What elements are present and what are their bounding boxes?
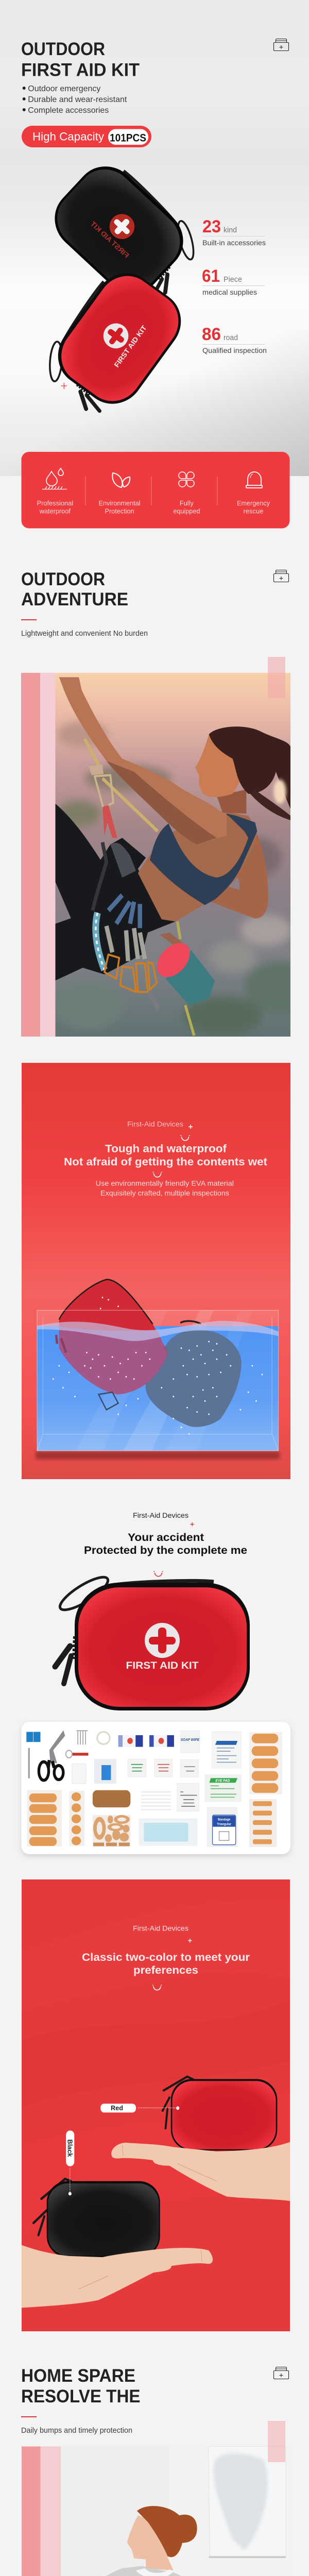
panel: kit contents: EYE PAD xyxy=(215,1779,230,1783)
item: plaster strip right xyxy=(249,1732,282,1794)
feature labels: waterproof xyxy=(39,507,71,515)
illustration: red and black kits on hands xyxy=(22,2077,290,2308)
heading: outdoor adventure: ADVENTURE xyxy=(21,589,128,609)
kit: black on hand xyxy=(33,2179,160,2257)
feature labels xyxy=(37,499,270,515)
stat: 23 kind xyxy=(202,217,266,247)
heading: home spare: HOME SPARE xyxy=(21,2366,135,2386)
item: sealed packets xyxy=(118,1735,174,1747)
feature labels: Fully xyxy=(180,499,194,507)
item: triangular bandage: Bandage xyxy=(218,1818,231,1822)
product: red first aid kit front view xyxy=(55,1572,250,1710)
text block: waterproof claim: Use environmentally friendly EVA material xyxy=(96,1179,234,1187)
photo panel: climber with pink stripes xyxy=(21,657,309,1038)
item: triangular bandage xyxy=(212,1815,236,1845)
kit: red on hand xyxy=(163,2077,277,2150)
title: outdoor first aid kit: OUTDOOR xyxy=(21,39,105,59)
text block: waterproof claim: First-Aid Devices xyxy=(127,1120,183,1128)
product: red kit, tilted: FIRST AID KIT xyxy=(113,324,148,369)
text block: two-color: First-Aid Devices xyxy=(133,1924,188,1932)
heading: home spare: RESOLVE THE xyxy=(21,2386,140,2406)
photo: climber on rope xyxy=(55,673,309,1038)
item: triangular bandage: Triangular xyxy=(217,1822,232,1826)
stat: 61 piece: medical supplies xyxy=(202,288,257,296)
heading: home spare: Daily bumps and timely protection xyxy=(21,2427,132,2435)
stat: 61 piece xyxy=(202,266,265,296)
item: plaster strip lower right xyxy=(249,1799,277,1847)
photo panel: woman at home with pink stripes xyxy=(22,2421,291,2576)
badge: high capacity 101pcs: High Capacity xyxy=(32,130,104,143)
stat: 23 kind: 23 xyxy=(202,217,221,236)
icon: small red plus xyxy=(61,383,67,389)
feature labels: Protection xyxy=(105,507,134,515)
stat: 23 kind: Built-in accessories xyxy=(202,239,266,247)
product: red kit, tilted xyxy=(31,257,193,427)
text block: waterproof claim: Not afraid of getting the contents wet xyxy=(64,1156,267,1168)
stat: 86 road: road xyxy=(224,334,238,342)
text block: waterproof claim xyxy=(64,1120,267,1197)
stat: 86 road: Qualified inspection xyxy=(202,346,267,354)
item: scissors xyxy=(39,1731,65,1781)
icon: waterproof drops xyxy=(42,468,67,489)
heading: home spare xyxy=(21,2366,140,2435)
label: black: Black xyxy=(66,2139,74,2157)
panel: tough and waterproof xyxy=(22,1063,290,1479)
heading: outdoor adventure xyxy=(21,569,148,638)
stat: 61 piece: Piece xyxy=(224,276,242,284)
feature bullet list: Outdoor emergency xyxy=(28,84,100,93)
stat: 86 road xyxy=(202,325,267,354)
icon: emergency beacon xyxy=(246,472,262,488)
illustration: kits in water tank xyxy=(36,1279,280,1459)
text block: your accident xyxy=(84,1512,247,1577)
stats column xyxy=(202,217,267,354)
feature labels: equipped xyxy=(173,507,200,515)
item: plaster strip left xyxy=(27,1790,62,1846)
panel: four features xyxy=(22,452,289,529)
text block: your accident: First-Aid Devices xyxy=(133,1512,188,1519)
feature labels: Emergency xyxy=(237,499,270,507)
panel: classic two-color xyxy=(22,1879,290,2331)
stat: 23 kind: kind xyxy=(224,226,237,234)
icon: fully equipped clover xyxy=(179,472,194,487)
text block: two-color: preferences xyxy=(133,1964,198,1976)
pink accent square xyxy=(268,2421,285,2462)
heading: outdoor adventure: OUTDOOR xyxy=(21,569,105,589)
item: round plasters xyxy=(70,1791,84,1846)
icon: first aid box xyxy=(274,39,288,50)
text block: two-color xyxy=(82,1924,250,1990)
icon: first aid box xyxy=(274,570,288,582)
title: outdoor first aid kit xyxy=(21,39,140,80)
text block: two-color: Classic two-color to meet your xyxy=(82,1952,250,1963)
item: blue pads xyxy=(26,1732,40,1742)
stat: 86 road: 86 xyxy=(202,325,221,344)
feature bullet list: Durable and wear-resistant xyxy=(28,95,127,104)
heading: outdoor adventure: Lightweight and convenient No burden xyxy=(21,630,148,638)
panel: kit contents xyxy=(22,1722,290,1854)
text block: your accident: Protected by the complete me xyxy=(84,1545,247,1556)
feature bullet list xyxy=(23,84,127,115)
text block: your accident: Your accident xyxy=(128,1532,204,1544)
pink accent square xyxy=(268,657,285,698)
feature labels: rescue xyxy=(243,507,264,515)
feature labels: Professional xyxy=(37,499,73,507)
icon: plus and smile marks xyxy=(153,1125,193,1177)
product: black kit, tilted xyxy=(42,148,212,315)
text block: waterproof claim: Exquisitely crafted, multiple inspections xyxy=(100,1189,229,1197)
title: outdoor first aid kit: FIRST AID KIT xyxy=(21,60,140,80)
feature labels: Environmental xyxy=(99,499,141,507)
icon: environmental leaves xyxy=(112,473,130,487)
feature bullet list: Complete accessories xyxy=(28,106,109,115)
product: black kit, tilted: FIRST AID KIT xyxy=(89,219,131,260)
photo: woman in chair xyxy=(106,2446,286,2576)
product: red first aid kit front view: FIRST AID KIT xyxy=(126,1660,199,1671)
badge: high capacity 101pcs: 101PCS xyxy=(110,132,146,144)
icon: first aid box xyxy=(274,2367,288,2379)
stat: 61 piece: 61 xyxy=(202,266,220,286)
text block: waterproof claim: Tough and waterproof xyxy=(105,1143,227,1155)
badge: high capacity 101pcs xyxy=(22,126,151,147)
item: shaped plasters xyxy=(93,1815,130,1847)
panel: kit contents: SOAP WIPE xyxy=(181,1738,200,1742)
label: red: Red xyxy=(111,2104,123,2112)
